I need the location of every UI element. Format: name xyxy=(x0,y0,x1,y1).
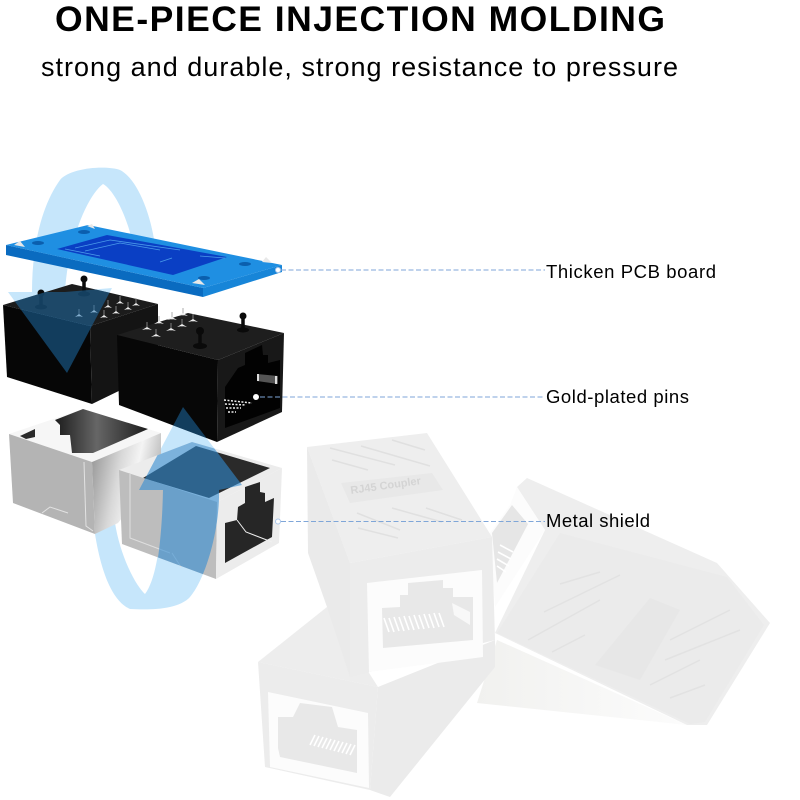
RJ45 port opening xyxy=(225,482,274,563)
rotation arrow: translucent part over parts xyxy=(15,290,242,574)
shadow of right coupler xyxy=(477,640,687,725)
rotation arrow: light band xyxy=(8,168,242,609)
callout: Metal shield xyxy=(276,510,650,531)
right black housing xyxy=(117,308,284,442)
right metal shield xyxy=(119,442,282,579)
callout: Gold-plated pins xyxy=(253,386,689,407)
RJ45 port opening xyxy=(225,345,280,428)
callout: Gold-plated pins: Gold-plated pins xyxy=(546,386,689,407)
faded product photo: three couplers xyxy=(258,433,770,797)
callout: Thicken PCB board xyxy=(276,261,716,282)
subtitle: strong and durable, strong resistance to pressure xyxy=(41,52,678,82)
PCB circuit panel xyxy=(57,235,227,275)
title: ONE-PIECE INJECTION MOLDING xyxy=(55,0,665,39)
left black housing xyxy=(3,276,158,404)
arrow up, right xyxy=(95,407,242,609)
metal clip xyxy=(257,374,278,384)
pins on right housing xyxy=(142,308,249,349)
callout: Thicken PCB board: Thicken PCB board xyxy=(546,261,716,282)
callout: Metal shield: Metal shield xyxy=(546,510,650,531)
gold-plated pin contacts xyxy=(224,400,252,412)
ghost coupler: top centre: RJ45 Coupler xyxy=(350,475,422,497)
ghost coupler: right xyxy=(490,478,770,725)
ghost coupler: top centre xyxy=(307,433,495,677)
pins on left housing xyxy=(35,276,140,318)
overlay on black housings xyxy=(15,290,206,438)
overlay on metal shield xyxy=(139,442,242,574)
left metal shield xyxy=(9,409,161,534)
arrow down, left xyxy=(8,168,155,373)
ghost coupler: bottom left xyxy=(258,607,495,797)
PCB board xyxy=(6,224,282,297)
